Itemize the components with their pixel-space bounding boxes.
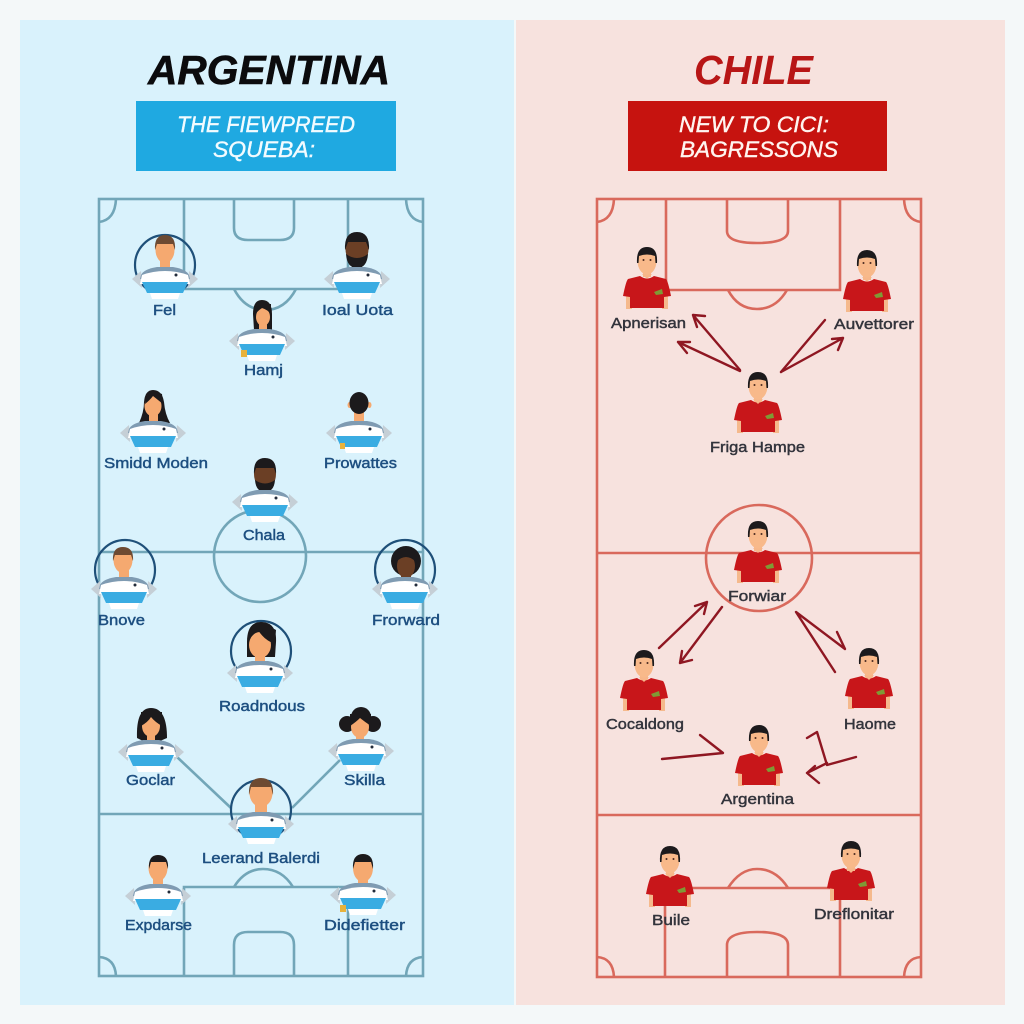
title: Chile: CHILE xyxy=(694,47,815,93)
player: Chala xyxy=(232,458,298,544)
player: Friga Hampe: Friga Hampe xyxy=(710,439,805,456)
player: Ioal Uota: Ioal Uota xyxy=(322,302,394,319)
player: Frorward: Frorward xyxy=(372,612,440,629)
pitch: Chile xyxy=(597,199,921,977)
arrows: Chile lower passes xyxy=(659,602,856,783)
player: Forwiar: Forwiar xyxy=(728,588,786,605)
player: Argentina: Argentina xyxy=(721,791,795,808)
panel: Argentina background xyxy=(20,20,514,1005)
player: Auvettorer: Auvettorer xyxy=(834,316,914,333)
player: Hamj xyxy=(229,300,295,379)
player: Prowattes xyxy=(324,392,397,472)
panel: Chile background xyxy=(516,20,1005,1005)
player: Haome: Haome xyxy=(844,716,896,733)
banner: Chile subtitle: BAGRESSONS xyxy=(680,137,838,162)
player: Smidd Moden xyxy=(104,390,208,472)
player: Cocaldong: Cocaldong xyxy=(606,716,684,733)
player: Leerand Balerdi xyxy=(202,778,320,867)
banner: Argentina subtitle: SQUEBA: xyxy=(213,137,315,162)
player: Goclar: Goclar xyxy=(126,772,175,789)
player: Fel xyxy=(132,235,198,319)
arrows: Chile upper passes xyxy=(678,315,843,372)
player: Skilla: Skilla xyxy=(344,772,386,789)
player: Apnerisan xyxy=(611,247,686,332)
player: Frorward xyxy=(372,540,440,629)
player: Didefietter xyxy=(324,854,405,934)
banner: Argentina subtitle: THE FIEWPREED xyxy=(177,112,355,137)
player: Auvettorer xyxy=(834,250,914,333)
title: Argentina: ARGENTINA xyxy=(147,47,390,93)
player: Dreflonitar: Dreflonitar xyxy=(814,906,894,923)
banner: Argentina subtitle xyxy=(136,101,396,171)
player: Expdarse xyxy=(125,855,192,934)
player: Leerand Balerdi: Leerand Balerdi xyxy=(202,850,320,867)
player: Roadndous xyxy=(219,621,305,715)
player: Bnove: Bnove xyxy=(98,612,145,629)
player: Buile xyxy=(646,846,694,929)
player: Didefietter: Didefietter xyxy=(324,917,405,934)
player: Dreflonitar xyxy=(814,841,894,923)
player: Haome xyxy=(844,648,896,733)
pitch: Argentina xyxy=(99,199,423,976)
player: Smidd Moden: Smidd Moden xyxy=(104,455,208,472)
player: Expdarse: Expdarse xyxy=(125,917,192,934)
player: Bnove xyxy=(91,540,157,629)
player: Prowattes: Prowattes xyxy=(324,455,397,472)
banner: Chile subtitle xyxy=(628,101,887,171)
player: Apnerisan: Apnerisan xyxy=(611,315,686,332)
player: Argentina xyxy=(721,725,795,808)
player: Fel: Fel xyxy=(153,302,176,319)
player: Hamj: Hamj xyxy=(244,362,283,379)
player: Cocaldong xyxy=(606,650,684,733)
player: Ioal Uota xyxy=(322,232,394,319)
player: Roadndous: Roadndous xyxy=(219,698,305,715)
player: Forwiar xyxy=(728,521,786,605)
player: Buile: Buile xyxy=(652,912,690,929)
banner: Chile subtitle: NEW TO CICI: xyxy=(679,112,829,137)
player: Goclar xyxy=(118,708,184,789)
player: Skilla xyxy=(328,707,394,789)
player: Chala: Chala xyxy=(243,527,286,544)
player: Friga Hampe xyxy=(710,372,805,456)
